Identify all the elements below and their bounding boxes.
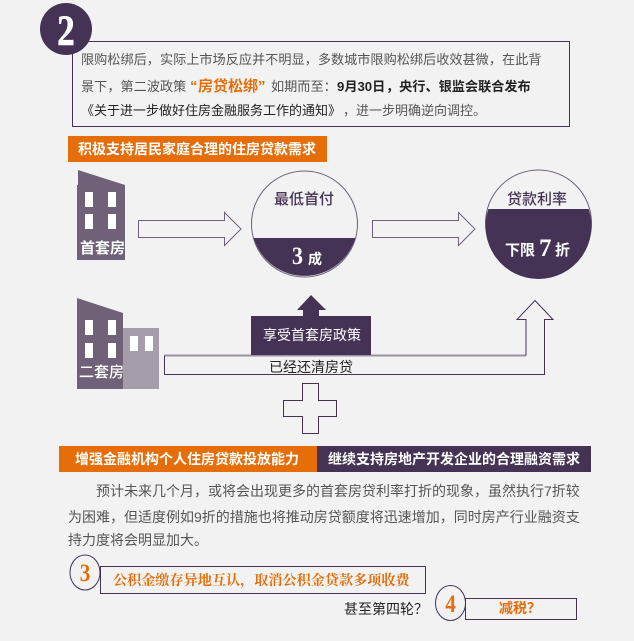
text block: forecast: 预计未来几个月，或将会出现更多的首套房贷利率打折的现象，虽然执行7折较 [96, 483, 580, 499]
callout: number 3 housing fund: 公积金缴存异地互认，取消公积金贷款多项收费 [113, 572, 411, 589]
icon: second home buildings [77, 298, 159, 389]
circle: loan rate: 贷款利率 [507, 191, 567, 208]
panel: intro text box: 9月30日 [337, 79, 385, 94]
panel: intro text box: ” [258, 78, 266, 95]
callout: number 4 tax cut: 减税？ [499, 600, 541, 616]
heading: housing loan demand: 积极支持居民家庭合理的住房贷款需求 [78, 141, 316, 157]
badge: number 2 [40, 3, 92, 55]
panel: intro text box: “ [190, 78, 198, 95]
icon: first home building: 首套房 [80, 239, 125, 257]
circle: loan rate: 折 [555, 241, 570, 259]
icon: plus [284, 384, 336, 434]
arrow: down payment to loan rate [372, 212, 475, 246]
icon: second home buildings: 二套房 [79, 364, 124, 381]
panel: intro text box: 如期而至： [271, 79, 337, 94]
text: even a fourth round: 甚至第四轮？ [344, 601, 428, 617]
circle: loan rate: 下限 [505, 242, 535, 259]
circle: minimum down payment: 最低首付 [274, 190, 334, 208]
arrow: second home to loan rate [164, 300, 553, 375]
callout: number 3 housing fund: 3 [80, 559, 90, 587]
callout: number 3 housing fund [70, 555, 426, 594]
panel: intro text box: 《关于进一步做好住房金融服务工作的通知》 [81, 103, 341, 118]
panel: intro text box: ，央行、银监会联合发布 [386, 78, 531, 94]
heading: housing loan demand [68, 136, 327, 162]
callout: first home policy with up arrow [251, 295, 371, 355]
callout: number 4 tax cut: 4 [445, 590, 456, 618]
heading: financial institutions lending [59, 446, 317, 472]
icon: first home building [77, 170, 125, 260]
callout: first home policy with up arrow: 享受首套房政策 [263, 327, 361, 343]
circle: minimum down payment [252, 171, 358, 277]
text block: forecast: 持力度将会明显加大。 [68, 532, 208, 548]
circle: minimum down payment: 成 [308, 251, 322, 267]
panel: intro text box [72, 42, 570, 126]
panel: intro text box: ，进一步明确逆向调控。 [343, 103, 486, 118]
text block: forecast: 为困难，但适度例如9折的措施也将推动房贷额度将迅速增加，同时房产行业融资支 [68, 509, 580, 525]
panel: intro text box: 限购松绑后，实际上市场反应并不明显，多数城市限购松绑后收效甚微，在此背 [81, 51, 541, 67]
badge: number 2: 2 [57, 7, 75, 55]
heading: developer financing [317, 446, 591, 472]
circle: minimum down payment: 3 [292, 243, 303, 270]
text block: forecast [68, 483, 580, 548]
callout: number 4 tax cut [436, 586, 576, 620]
circle: loan rate: 7 [539, 235, 552, 262]
circle: loan rate [486, 170, 592, 279]
heading: financial institutions lending: 增强金融机构个人住房贷款投放能力 [75, 451, 299, 467]
panel: intro text box: 房贷松绑 [198, 77, 258, 95]
panel: intro text box: 景下，第二波政策 [81, 78, 186, 94]
arrow: second home to loan rate: 已经还清房贷 [269, 359, 353, 375]
heading: developer financing: 继续支持房地产开发企业的合理融资需求 [328, 451, 580, 467]
arrow: first home to down payment [138, 212, 241, 246]
